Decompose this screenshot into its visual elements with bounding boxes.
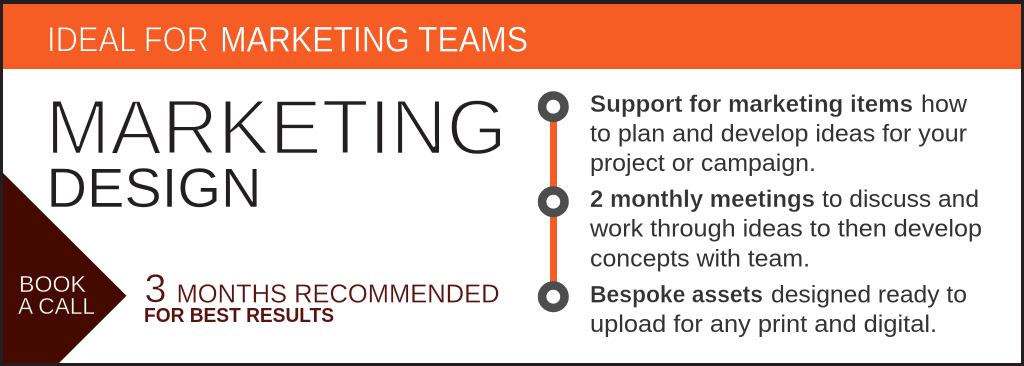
item: marketing support: Support for marketing items xyxy=(590,91,913,118)
timeline xyxy=(542,96,564,308)
item: marketing support xyxy=(590,91,968,177)
call to action arrow xyxy=(3,173,126,363)
recommendation note: MONTHS RECOMMENDED xyxy=(176,280,500,308)
title xyxy=(46,83,507,219)
item: monthly meetings: 2 monthly meetings xyxy=(590,186,815,213)
item: monthly meetings: work through ideas to then develop xyxy=(589,216,982,243)
timeline marker 1 xyxy=(542,96,564,118)
call to action arrow: A CALL xyxy=(18,293,95,319)
call to action arrow: BOOK xyxy=(19,271,87,297)
item: bespoke assets: upload for any print and digital. xyxy=(590,311,937,338)
recommendation note: FOR BEST RESULTS xyxy=(144,305,334,327)
item: bespoke assets: designed ready to xyxy=(771,282,967,309)
item: marketing support: to plan and develop ideas for your xyxy=(590,121,967,148)
item: bespoke assets xyxy=(590,282,967,338)
header banner: IDEAL FOR xyxy=(47,20,209,60)
item: marketing support: project or campaign. xyxy=(590,150,816,177)
item: monthly meetings: to discuss and xyxy=(822,186,979,213)
title: MARKETING xyxy=(46,83,507,171)
item: bespoke assets: Bespoke assets xyxy=(590,282,763,309)
recommendation note xyxy=(144,267,500,327)
item: monthly meetings xyxy=(589,186,982,273)
item: marketing support: how xyxy=(921,91,968,118)
header banner: MARKETING TEAMS xyxy=(220,20,528,60)
recommendation note: 3 xyxy=(144,267,166,311)
timeline marker 2 xyxy=(542,190,564,213)
header banner xyxy=(3,4,1021,69)
title: DESIGN xyxy=(46,156,262,219)
item: monthly meetings: concepts with team. xyxy=(590,246,810,273)
timeline marker 3 xyxy=(542,286,564,308)
